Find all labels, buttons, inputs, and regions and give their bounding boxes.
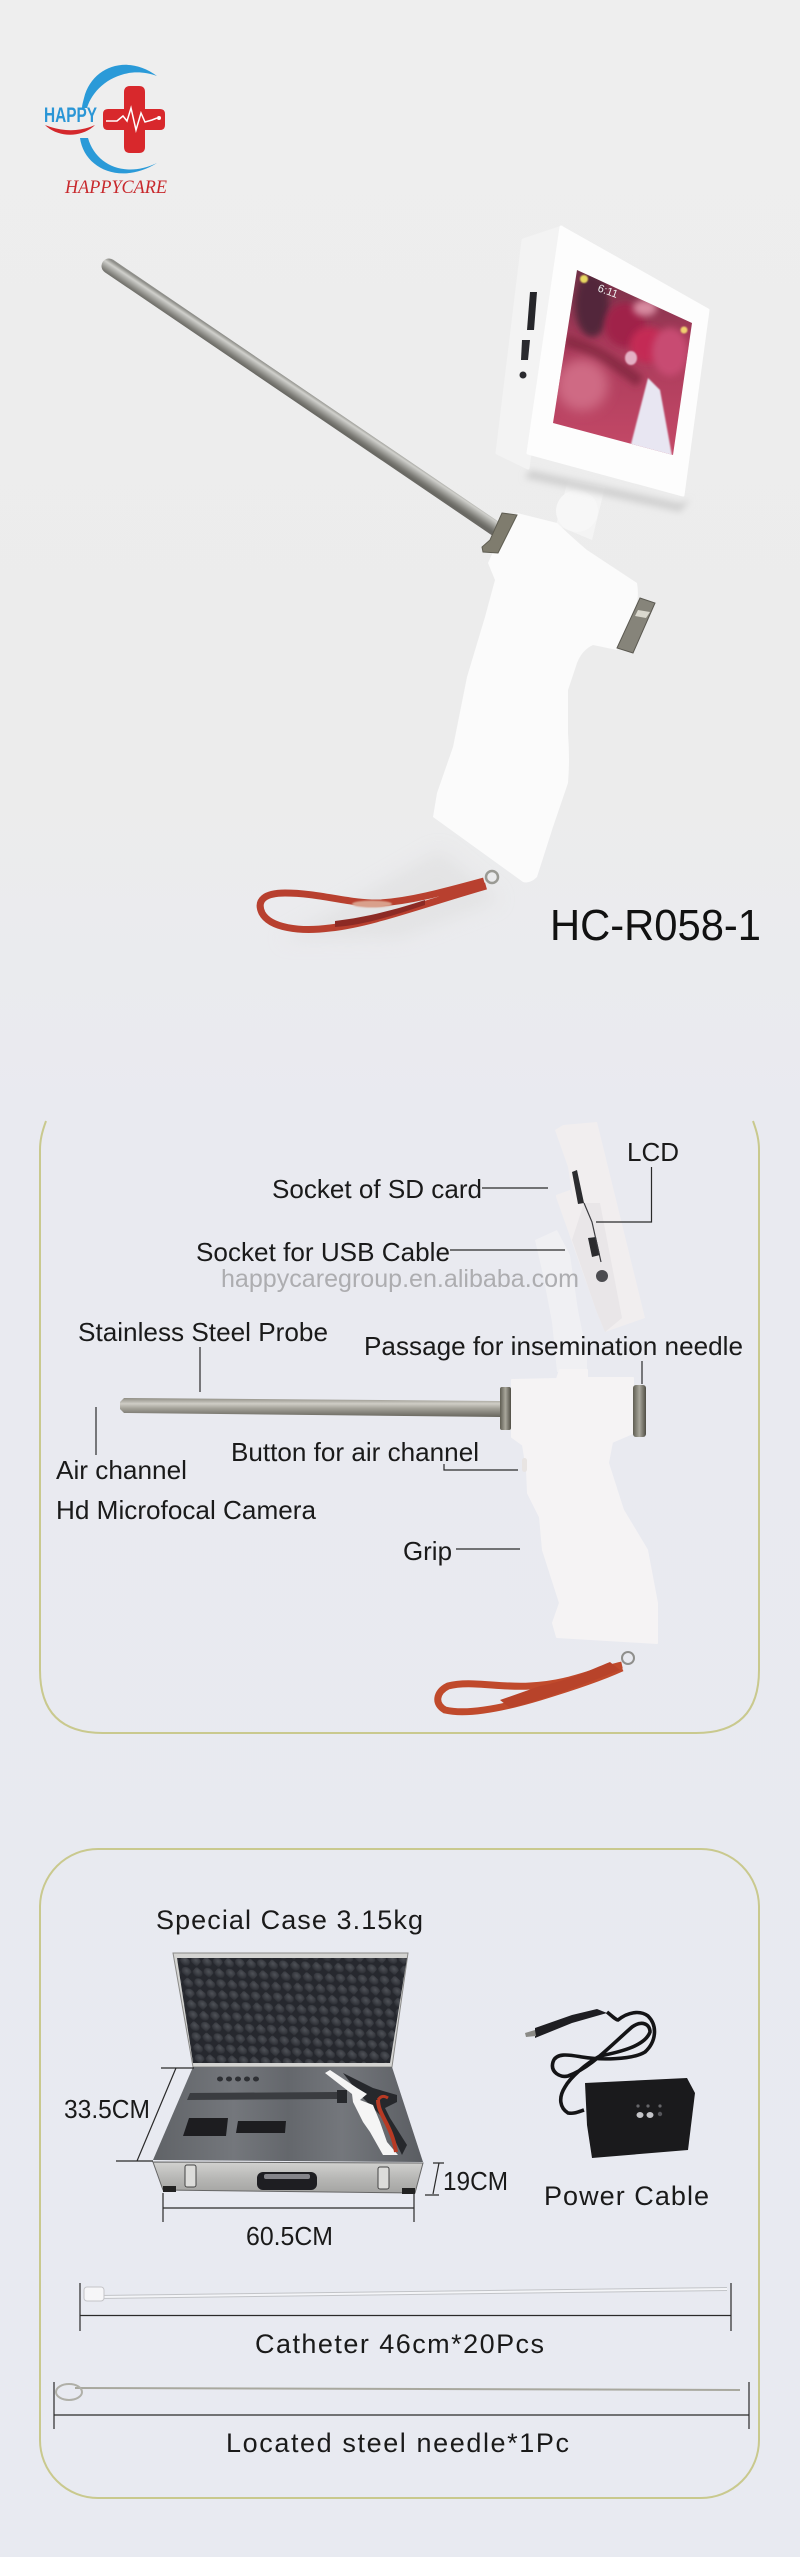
instrument holes [217,2076,259,2082]
power socket [520,372,526,378]
label: LCD: LCD [627,1137,679,1167]
label: Hd Microfocal Camera: Hd Microfocal Camera [56,1495,317,1525]
rear collar highlight [635,610,650,618]
aluminium case [153,1953,423,2194]
air button [522,1458,527,1472]
adapter [585,2078,695,2158]
rear collar [633,1385,646,1437]
wrist strap [260,871,498,929]
label: 19CM: 19CM [443,2166,508,2196]
LCD screen image [553,270,692,455]
monitor side face [497,227,562,468]
label: Stainless Steel Probe: Stainless Steel Probe [78,1317,328,1347]
strap highlight [352,900,392,908]
monitor edge [555,1122,645,1332]
corners [163,2186,415,2194]
label: 33.5CM: 33.5CM [64,2094,150,2124]
lid foam [177,1958,407,2063]
hinge arm [535,1230,587,1372]
steel needle [56,2384,740,2400]
monitor [497,227,708,512]
panel outline [40,1121,759,1733]
label: Located steel needle: Located steel needle*1Pc [226,2428,569,2458]
car plug [525,2009,607,2038]
dimension lines [54,2068,749,2429]
model number: HC-R058-1 [550,901,761,950]
probe recess [187,2090,347,2103]
case lid frame [173,1953,408,2067]
gun recess [343,2073,407,2155]
label: Socket for USB Cable: Socket for USB Cable [196,1237,450,1267]
USB slot [521,340,530,360]
leader lines [96,1167,652,1549]
logo: HAPPY wordmark: HAPPY [44,104,97,127]
strap dark fold [335,900,425,927]
cutouts [183,2118,228,2136]
SD card slot [527,292,537,330]
case base foam [153,2067,423,2162]
heading: Special Case: Special Case 3.15kg [156,1905,423,1935]
cutout [236,2121,286,2133]
gun in case [325,2070,398,2155]
side-view device [120,1122,657,1712]
panel: accessories [40,1849,759,2498]
latches [185,2165,389,2189]
case front [153,2162,423,2193]
USB slot [588,1237,600,1257]
front collar [482,513,517,553]
SD slot [572,1170,584,1204]
rear collar [617,598,655,653]
steel probe [109,266,496,529]
logo: red smile [45,125,95,135]
LCD screen image: 6:11 [596,283,619,301]
label: Catheter: Catheter 46cm*20Pcs [255,2329,544,2359]
cord [552,2012,654,2113]
label: Air channel: Air channel [56,1455,187,1485]
panel outline [40,1849,759,2498]
catheter [84,2287,727,2301]
label: Grip: Grip [403,1536,452,1566]
label: Power Cable: Power Cable [544,2181,709,2211]
front collar [500,1387,511,1430]
logo: HAPPYCARE wordmark: HAPPYCARE [64,177,167,198]
hinge [556,480,605,540]
power socket [596,1270,608,1282]
logo: Happycare [44,65,167,198]
monitor shadow [525,470,690,512]
seam line [584,1203,601,1262]
monitor front face [528,227,708,495]
handle [257,2172,317,2190]
product photo: insemination gun [109,227,708,940]
label: Socket of SD card: Socket of SD card [272,1174,482,1204]
label: Passage for insemination needle: Passage for insemination needle [364,1331,743,1361]
wrist strap [438,1652,634,1712]
watermark: happycaregroup.en.alibaba.com [221,1265,579,1293]
strap wide section [500,1662,620,1708]
label: Button for air channel: Button for air channel [231,1437,479,1467]
gun body [512,1370,657,1643]
soft shadow [280,850,500,940]
steel probe [120,1398,500,1417]
logo: blue arcs [80,65,157,173]
gun body [433,513,638,882]
monitor lower seam [572,1203,622,1332]
logo: red cross with heartbeat [103,86,165,153]
panel: device anatomy [40,1121,759,1733]
label: 60.5CM: 60.5CM [246,2221,333,2251]
power cable [525,2009,695,2158]
handle highlight [264,2174,310,2179]
